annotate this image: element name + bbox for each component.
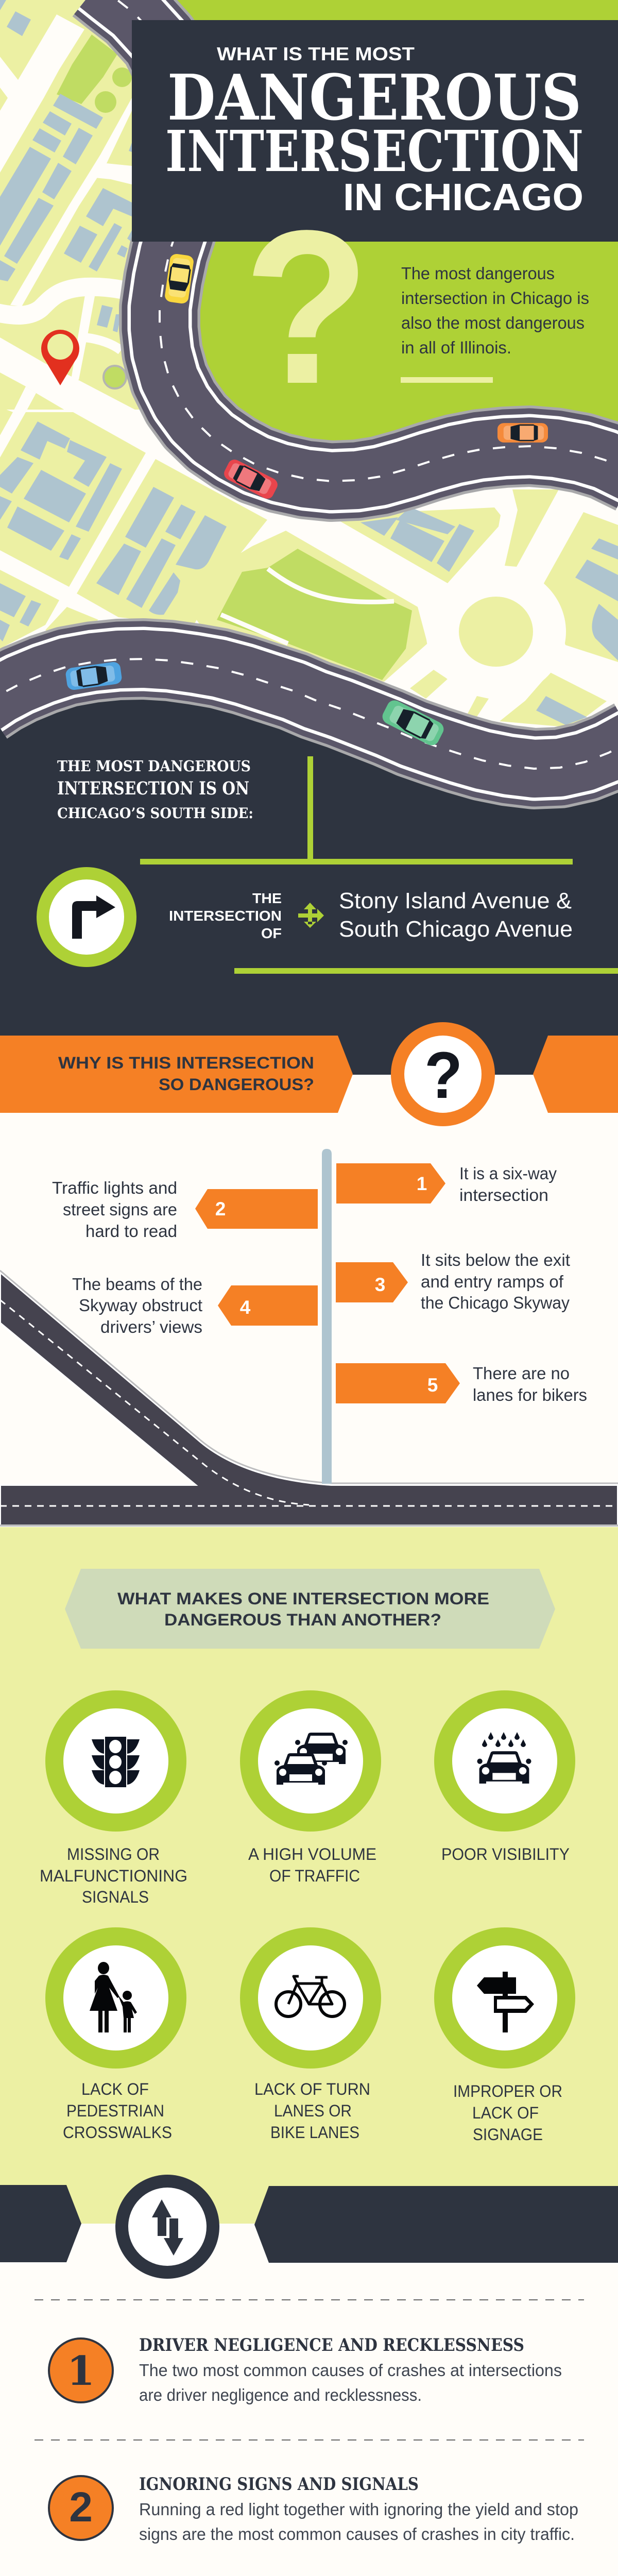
sign 3: and entry ramps of	[421, 1272, 564, 1291]
factor: lanes: BIKE LANES	[270, 2123, 359, 2142]
cause 1	[49, 2335, 562, 2404]
sign 3	[336, 1250, 570, 1312]
car: yellow	[164, 253, 194, 304]
intersection label: THE	[252, 890, 282, 906]
cause 2: Running a red light together with ignoring the yield and stop	[139, 2500, 578, 2519]
intro text	[401, 264, 589, 357]
icon: two-way arrows badge	[115, 2175, 219, 2279]
icon: map pin	[41, 330, 79, 385]
big question mark: ?	[244, 185, 370, 430]
factor: signals: MISSING OR	[67, 1845, 160, 1863]
icon: rain and car	[477, 1732, 531, 1784]
title line 1: WHAT IS THE MOST	[217, 43, 415, 64]
intersection label: INTERSECTION	[169, 908, 282, 924]
icon: two cars	[274, 1733, 348, 1785]
intro underline	[401, 377, 493, 383]
intro text: The most dangerous	[401, 264, 555, 283]
factor: crosswalks: CROSSWALKS	[63, 2123, 172, 2142]
icon: bicycle	[276, 1976, 345, 2016]
sign 4: 4	[240, 1297, 251, 1318]
heading banner	[65, 1569, 555, 1649]
sign 5: lanes for bikers	[473, 1385, 587, 1404]
sign 2: hard to read	[85, 1222, 177, 1241]
intro text: also the most dangerous	[401, 313, 585, 332]
truck: green	[380, 698, 446, 748]
icon: question badge	[391, 1022, 495, 1126]
dark section background	[0, 659, 618, 1075]
factor: visibility: POOR VISIBILITY	[441, 1845, 570, 1863]
south side heading	[57, 757, 253, 822]
winding road top	[98, 0, 618, 481]
roundabout	[426, 566, 566, 698]
title panel	[132, 20, 618, 242]
sign 3: the Chicago Skyway	[421, 1293, 570, 1312]
factor: crosswalks: LACK OF	[81, 2080, 149, 2098]
heading banner: WHAT MAKES ONE INTERSECTION MORE	[117, 1589, 489, 1608]
factor: signals: SIGNALS	[82, 1888, 149, 1906]
title line 4: IN CHICAGO	[343, 176, 583, 218]
map parks	[57, 35, 412, 680]
factor: traffic volume: OF TRAFFIC	[269, 1867, 360, 1885]
pole	[322, 1149, 332, 1484]
factor: traffic volume	[240, 1690, 381, 1885]
icon: direction signs	[477, 1972, 534, 2032]
intersection label: OF	[261, 925, 282, 941]
intersection names: Stony Island Avenue &	[339, 888, 572, 913]
factor: lanes	[240, 1927, 381, 2142]
factor: signage: IMPROPER OR	[453, 2082, 562, 2100]
sign 5	[336, 1363, 587, 1404]
sign 5: There are no	[473, 1364, 570, 1383]
map streets	[0, 14, 154, 464]
factor: traffic volume: A HIGH VOLUME	[248, 1845, 376, 1863]
sign 3: 3	[375, 1274, 385, 1295]
south side heading: THE MOST DANGEROUS	[57, 757, 251, 775]
orange banner: why	[0, 1036, 618, 1113]
factor: signage	[434, 1927, 575, 2144]
sign 2: Traffic lights and	[52, 1178, 177, 1197]
road: skyway ramp	[0, 1270, 618, 1527]
factor: signage: SIGNAGE	[473, 2125, 543, 2144]
south side heading: CHICAGO’S SOUTH SIDE:	[57, 805, 253, 822]
connector lines	[140, 756, 618, 974]
causes list	[35, 2300, 584, 2576]
intro text: in all of Illinois.	[401, 338, 511, 357]
factor: visibility	[434, 1690, 575, 1863]
cause 1: The two most common causes of crashes at intersections	[139, 2361, 562, 2380]
icon: turn right sign	[37, 867, 136, 967]
cause 1: are driver negligence and recklessness.	[139, 2385, 422, 2404]
cause 2: signs are the most common causes of crashes in city traffic.	[139, 2524, 575, 2544]
icon: parent and child	[90, 1962, 137, 2032]
car: orange	[497, 423, 548, 443]
cause 2: 2	[69, 2484, 93, 2531]
sign 2	[52, 1178, 318, 1241]
sign 1: 1	[417, 1173, 427, 1194]
green hero background	[98, 0, 618, 481]
dark divider band	[0, 2185, 618, 2263]
sign 4	[72, 1275, 318, 1336]
orange banner: why: SO DANGEROUS?	[159, 1075, 314, 1094]
sign 4: Skyway obstruct	[79, 1296, 202, 1315]
signpost	[52, 1149, 587, 1484]
cause 1: 1	[67, 2348, 95, 2395]
banner heading: WHY IS THIS INTERSECTION	[58, 1054, 314, 1072]
cause 1: DRIVER NEGLIGENCE AND RECKLESSNESS	[139, 2335, 524, 2355]
sign 2: 2	[215, 1198, 226, 1219]
intro text: intersection in Chicago is	[401, 289, 589, 308]
heading banner: DANGEROUS THAN ANOTHER?	[164, 1611, 441, 1629]
map blocks	[0, 407, 618, 727]
icon: cross arrows	[298, 903, 324, 928]
sign 1: It is a six-way	[459, 1164, 557, 1183]
intersection names	[339, 888, 573, 942]
sign 3: It sits below the exit	[421, 1250, 570, 1269]
factor: signals	[40, 1690, 187, 1906]
winding road lower	[0, 659, 618, 769]
car: blue	[65, 661, 123, 691]
hero map illustration	[0, 0, 618, 770]
factor: signals: MALFUNCTIONING	[40, 1867, 187, 1885]
icon: question badge: ?	[424, 1039, 462, 1112]
panel: what makes an intersection dangerous	[0, 1527, 618, 2224]
sign 4: The beams of the	[72, 1275, 202, 1294]
intersection names: South Chicago Avenue	[339, 917, 573, 942]
factor: lanes: LACK OF TURN	[254, 2080, 370, 2098]
map buildings	[0, 0, 618, 725]
sign 5: 5	[427, 1375, 438, 1396]
factor: crosswalks: PEDESTRIAN	[66, 2102, 164, 2120]
intersection label	[169, 890, 282, 941]
sign 1	[336, 1163, 557, 1205]
factor: lanes: LANES OR	[274, 2102, 352, 2120]
cause 2: IGNORING SIGNS AND SIGNALS	[139, 2474, 419, 2495]
factor: signage: LACK OF	[472, 2104, 539, 2122]
south side heading: INTERSECTION IS ON	[57, 778, 249, 799]
factor: crosswalks	[45, 1927, 186, 2142]
cause 2	[49, 2474, 578, 2544]
sign 2: street signs are	[63, 1200, 177, 1219]
icon: traffic light	[92, 1737, 140, 1787]
sign 1: intersection	[459, 1185, 548, 1205]
car: red	[222, 457, 280, 501]
sign 4: drivers’ views	[100, 1317, 202, 1336]
